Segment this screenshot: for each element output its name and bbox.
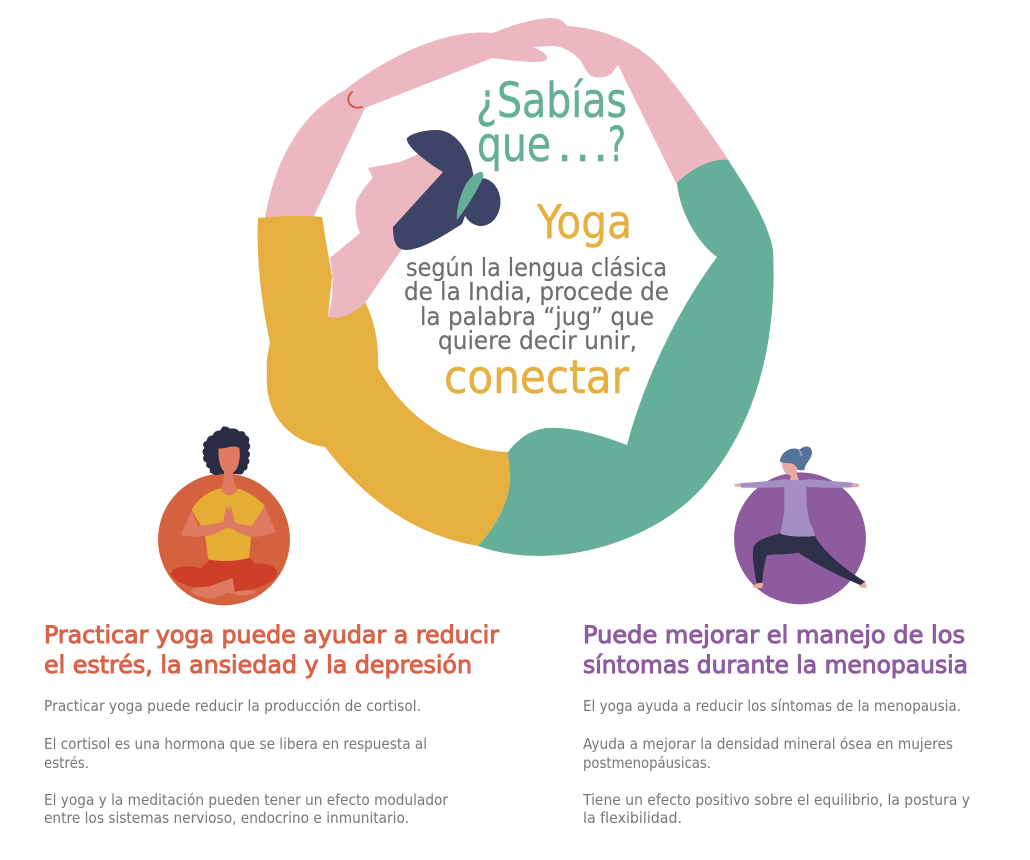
title: ¿Sabías que...?: ¿Sabías [476,73,627,129]
hair [202,427,250,475]
text block: definition [404,253,669,355]
text block: beneficios [582,697,970,827]
feet [191,578,256,598]
praying hands [223,505,236,528]
title: ¿Sabías que...?: que [477,117,551,173]
title: ¿Sabías que...?: . [575,117,590,173]
figure: red bracelet mark [348,92,362,108]
text block: cortisol: estrés. [44,754,89,772]
figure: green sleeve and arm [478,160,774,556]
text block: beneficios: Tiene un efecto positivo sobre el equilibrio, la postura y [582,791,970,809]
yellow shirt [192,488,265,561]
arm upper skin [181,506,276,535]
icon: warrior pose woman [734,446,867,604]
text block: definition: quiere decir unir, [438,326,637,355]
text block: cortisol: El yoga y la meditación pueden tener un efecto modulador [44,791,449,809]
heading: estrés [44,621,499,679]
figure: navy hair bun [462,178,500,226]
panel: estrés [44,621,499,827]
forearms [181,507,276,537]
red trousers [171,558,277,592]
text block: beneficios: Ayuda a mejorar la densidad mineral ósea en mujeres [583,735,953,753]
figure: green hair band [457,172,483,220]
heading: menopausia [583,621,968,679]
neck [221,470,237,500]
arms [741,479,852,488]
figure: navy hair [393,130,475,250]
figure: pink lower arm and chin [328,152,443,318]
ponytail [797,446,812,470]
torso [780,482,815,537]
text block: cortisol: Practicar yoga puede reducir la producción de cortisol. [44,697,421,715]
figure: pink raised arms [265,18,730,218]
face and neck [782,461,800,484]
face [218,446,240,473]
figure: gold shirt and torso [258,216,510,546]
icon: seated meditation woman [158,427,290,605]
text block: definition: de la India, procede de [404,277,669,306]
title: ¿Sabías que...? [476,73,627,173]
text block: beneficios: postmenopáusicas. [583,754,711,772]
text block: definition: según la lengua clásica [406,253,667,282]
text block: cortisol [44,697,449,827]
panel: menopausia [582,621,970,827]
title: ¿Sabías que...?: . [593,117,608,173]
heading: menopausia: síntomas durante la menopausia [583,651,968,679]
heading: estrés: Practicar yoga puede ayudar a reducir [44,621,499,649]
heading: conectar: conectar [444,350,629,404]
yoga figure ring [258,18,774,556]
title: ¿Sabías que...?: ? [608,117,626,173]
text block: beneficios: El yoga ayuda a reducir los síntomas de la menopausia. [583,697,961,715]
heading: estrés: el estrés, la ansiedad y la depresión [44,651,472,679]
purple circle [734,472,866,604]
dark leggings [753,533,865,585]
orange circle [158,473,290,605]
text block: beneficios: la flexibilidad. [583,809,682,827]
title: ¿Sabías que...?: . [557,117,572,173]
heading: Yoga: Yoga [536,195,632,249]
feet and hands [734,483,867,588]
text block: cortisol: El cortisol es una hormona que se libera en respuesta al [44,735,427,753]
heading: menopausia: Puede mejorar el manejo de los [583,621,965,649]
text block: cortisol: entre los sistemas nervioso, endocrino e inmunitario. [44,809,409,827]
hair band [798,449,802,457]
hair [780,449,802,468]
text block: definition: la palabra “jug” que [420,302,654,331]
